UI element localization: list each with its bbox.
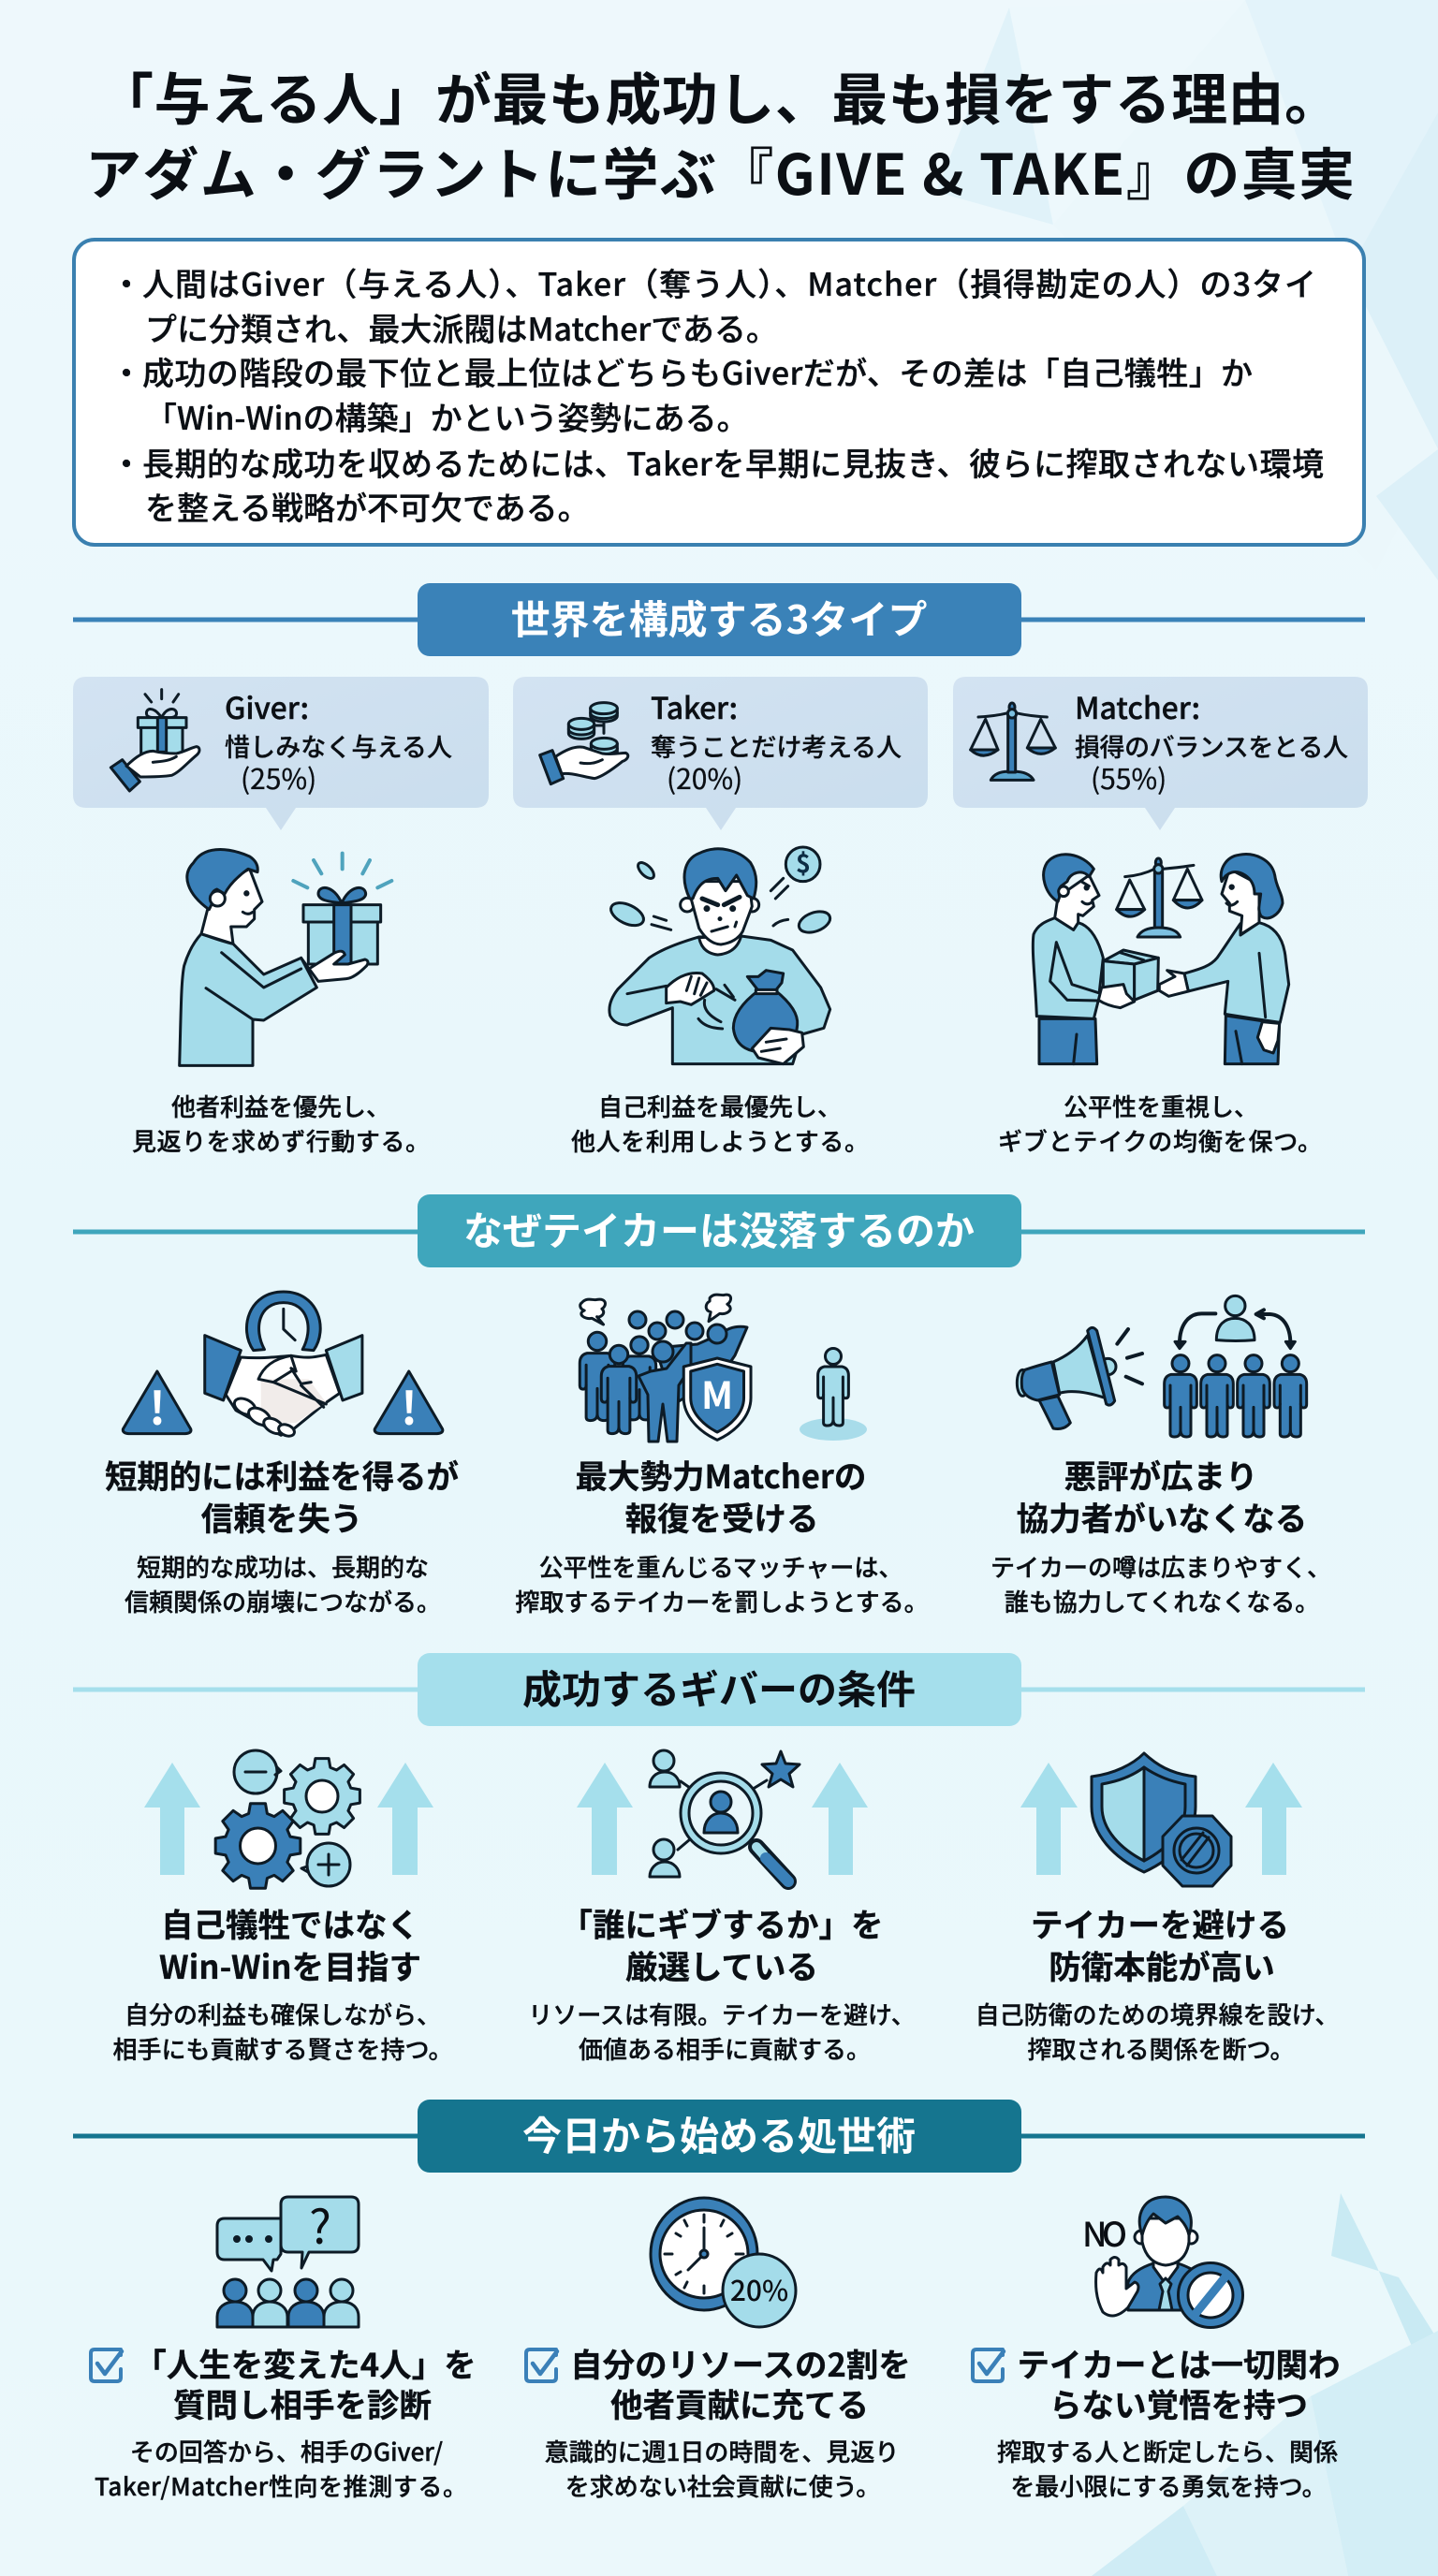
condition: defense instinct: 自己防衛のための境界線を設け、 <box>976 1997 1339 2031</box>
tactic: avoid takers: テイカーとは一切関わ <box>1017 2339 1341 2386</box>
condition: defense instinct: 防衛本能が高い <box>1049 1941 1275 1988</box>
panel: summary: ・ <box>110 439 142 485</box>
tactic: twenty percent of resources: 意識的に週1日の時間を、見返り <box>545 2434 899 2468</box>
panel: summary: プに分類され、最大派閥はMatcherである。 <box>145 304 778 350</box>
card: Taker: 奪うことだけ考える人 <box>651 727 902 764</box>
icon: shield with stop sign <box>1092 1753 1231 1886</box>
description: taker <box>571 1089 869 1158</box>
condition: choose whom to give: 価値ある相手に貢献する。 <box>579 2031 871 2066</box>
description: giver <box>132 1089 430 1158</box>
icon: checkbox <box>91 2349 122 2381</box>
icon: scales <box>971 703 1055 780</box>
section: why takers fall <box>73 1194 1365 1618</box>
icon: speech bubbles over four people: ? <box>309 2190 331 2258</box>
reason: retaliation <box>515 1451 929 1618</box>
icon: checkbox <box>526 2349 557 2381</box>
reason: bad reputation: 誰も協力してくれなくなる。 <box>1005 1584 1319 1618</box>
description: taker: 他人を利用しようとする。 <box>571 1123 869 1158</box>
tactic: twenty percent of resources: 自分のリソースの2割を <box>570 2339 911 2386</box>
description: taker: 自己利益を最優先し、 <box>598 1089 842 1123</box>
icon: coins on hand <box>540 703 628 784</box>
tactic: avoid takers <box>973 2339 1341 2503</box>
title: 「与える人」が最も成功し、最も損をする理由。 <box>97 55 1341 137</box>
card: Giver: (25%) <box>241 756 316 798</box>
card: Matcher: 損得のバランスをとる人 <box>1075 727 1348 764</box>
reason: bad reputation: テイカーの噂は広まりやすく、 <box>990 1549 1331 1584</box>
icon: crowd with M shield <box>580 1295 867 1442</box>
condition: win-win: Win-Winを目指す <box>159 1941 421 1988</box>
panel: summary: を整える戦略が不可欠である。 <box>145 483 590 529</box>
tactic: four people question: 「人生を変えた4人」を <box>134 2339 477 2386</box>
condition: win-win: 自己犠牲ではなく <box>161 1899 419 1946</box>
panel: summary: ・ <box>110 259 142 305</box>
tactic: avoid takers: を最小限にする勇気を持つ。 <box>1010 2468 1327 2503</box>
condition: defense instinct: テイカーを避ける <box>1031 1899 1289 1946</box>
tactic: avoid takers: らない覚悟を持つ <box>1049 2379 1308 2426</box>
tactic: twenty percent of resources: 他者貢献に充てる <box>610 2379 869 2426</box>
condition: win-win <box>113 1899 452 2066</box>
icon: magnifier selecting a person <box>650 1750 800 1881</box>
description: matcher: 公平性を重視し、 <box>1064 1089 1258 1123</box>
heading: three types <box>73 583 1365 656</box>
card: Giver: Giver: <box>225 685 309 728</box>
icon: man refusing with NO: NO <box>1082 2208 1127 2257</box>
tactic: twenty percent of resources <box>526 2339 911 2503</box>
heading: why takers fall <box>73 1194 1365 1267</box>
tactic: four people question: Taker/Matcher性向を推測する。 <box>95 2468 467 2503</box>
heading: tactics from today: 今日から始める処世術 <box>522 2105 916 2162</box>
condition: defense instinct <box>976 1899 1339 2066</box>
icon: broken handshake with warnings: ! <box>401 1372 418 1438</box>
icon: clock with 20 percent: 20% <box>730 2268 788 2309</box>
condition: win-win: 自分の利益も確保しながら、 <box>125 1997 441 2031</box>
card: Giver: 惜しみなく与える人 <box>225 727 452 764</box>
section: three types <box>73 583 1368 1158</box>
description: matcher <box>998 1089 1322 1158</box>
reason: short-term profit <box>105 1451 459 1618</box>
heading: why takers fall: なぜテイカーは没落するのか <box>463 1200 975 1257</box>
tactic: twenty percent of resources: を求めない社会貢献に使う。 <box>565 2468 880 2503</box>
icon: broken handshake with warnings <box>123 1292 443 1438</box>
tactic: four people question <box>91 2339 477 2503</box>
condition: win-win: 相手にも貢献する賢さを持つ。 <box>113 2031 452 2066</box>
card: Taker: Taker: <box>651 685 738 728</box>
title: アダム・グラントに学ぶ『GIVE & TAKE』の真実 <box>85 130 1355 212</box>
panel: summary: 人間はGiver（与える人）、Taker（奪う人）、Matcher（損得勘定の人）の3タイ <box>142 259 1316 305</box>
condition: defense instinct: 搾取される関係を断つ。 <box>1028 2031 1294 2066</box>
panel: summary: 成功の階段の最下位と最上位はどちらもGiverだが、その差は「自己犠牲」か <box>142 348 1253 394</box>
illustration: taker person with money bag <box>608 843 833 1064</box>
reason: retaliation: 公平性を重んじるマッチャーは、 <box>539 1549 902 1584</box>
illustration: taker person with money bag: $ <box>796 843 811 880</box>
icon: gears with plus and minus <box>215 1750 360 1888</box>
arrows: upward <box>144 1763 1302 1875</box>
tactic: four people question: 質問し相手を診断 <box>173 2379 432 2426</box>
reason: bad reputation <box>990 1451 1331 1618</box>
condition: choose whom to give: 厳選している <box>625 1941 818 1988</box>
description: matcher: ギブとテイクの均衡を保つ。 <box>998 1123 1322 1158</box>
icon: crowd with M shield: M <box>701 1366 733 1420</box>
card: Matcher: (55%) <box>1091 756 1167 798</box>
heading: three types: 世界を構成する3タイプ <box>511 589 927 646</box>
icon: checkbox <box>973 2349 1004 2381</box>
reason: retaliation: 最大勢力Matcherの <box>576 1451 866 1498</box>
reason: short-term profit: 信頼関係の崩壊につながる。 <box>125 1584 441 1618</box>
card: Taker <box>513 677 928 830</box>
icon: gift on hand <box>110 690 199 791</box>
heading: successful giver conditions <box>73 1653 1365 1726</box>
reason: bad reputation: 悪評が広まり <box>1064 1451 1258 1498</box>
panel: summary <box>74 240 1364 545</box>
panel: summary: 「Win-Winの構築」かという姿勢にある。 <box>145 393 749 439</box>
tactic: avoid takers: 搾取する人と断定したら、関係 <box>997 2434 1338 2468</box>
section: tactics from today <box>73 2100 1365 2503</box>
panel: summary: 長期的な成功を収めるためには、Takerを早期に見抜き、彼らに搾取されない環境 <box>142 439 1324 485</box>
reason: retaliation: 搾取するテイカーを罰しようとする。 <box>515 1584 929 1618</box>
heading: successful giver conditions: 成功するギバーの条件 <box>522 1659 916 1716</box>
card: Giver <box>73 677 489 830</box>
description: giver: 他者利益を優先し、 <box>171 1089 390 1123</box>
heading: tactics from today <box>73 2100 1365 2173</box>
icon: broken handshake with warnings: ! <box>149 1372 166 1438</box>
illustration: matcher pair exchanging a box <box>1033 855 1289 1064</box>
condition: choose whom to give: 「誰にギブするか」を <box>560 1899 884 1946</box>
reason: bad reputation: 協力者がいなくなる <box>1017 1493 1307 1540</box>
icon: man refusing with NO <box>1082 2197 1243 2327</box>
icon: megaphone and spreading rumor <box>1017 1295 1307 1437</box>
card: Matcher: Matcher: <box>1075 685 1200 728</box>
icon: clock with 20 percent <box>651 2198 796 2327</box>
icon: speech bubbles over four people <box>217 2190 359 2327</box>
card: Taker: (20%) <box>667 756 742 798</box>
section: successful giver conditions <box>73 1653 1365 2066</box>
reason: retaliation: 報復を受ける <box>625 1493 818 1540</box>
description: giver: 見返りを求めず行動する。 <box>132 1123 430 1158</box>
condition: choose whom to give <box>528 1899 916 2066</box>
reason: short-term profit: 信頼を失う <box>201 1493 362 1540</box>
card: Matcher <box>953 677 1368 830</box>
tactic: four people question: その回答から、相手のGiver/ <box>130 2434 443 2468</box>
reason: short-term profit: 短期的には利益を得るが <box>105 1451 459 1498</box>
reason: short-term profit: 短期的な成功は、長期的な <box>137 1549 429 1584</box>
illustration: giver person with gift <box>180 849 391 1065</box>
title <box>85 55 1355 212</box>
panel: summary: ・ <box>110 348 142 394</box>
condition: choose whom to give: リソースは有限。テイカーを避け、 <box>528 1997 916 2031</box>
